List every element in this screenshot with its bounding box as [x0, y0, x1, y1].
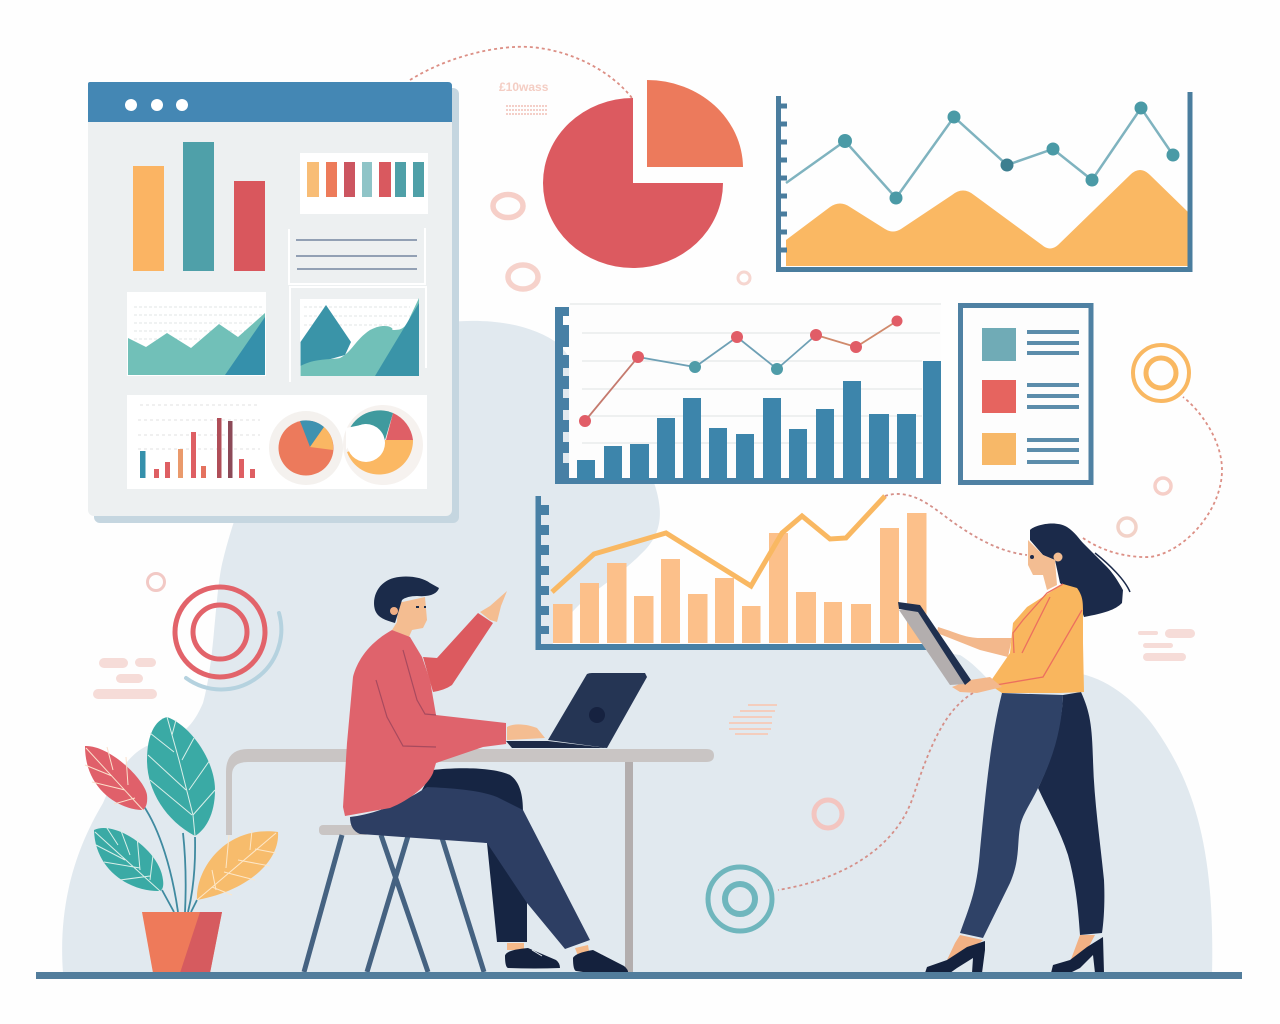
area chart left: [127, 292, 266, 376]
eye: [1030, 555, 1034, 559]
pot: [142, 912, 222, 973]
tablet: [898, 602, 971, 685]
woman: [925, 524, 1130, 973]
shoes: [505, 948, 628, 974]
eyes: [416, 606, 426, 608]
lower teal leaf: [94, 825, 163, 891]
mini donut chart: [343, 405, 423, 485]
blue bar and line chart: [555, 303, 941, 484]
typing hand: [507, 724, 545, 740]
dotted connector: top: [410, 47, 632, 98]
dotted connector: right: [1083, 397, 1222, 557]
teal target ring: [708, 867, 772, 931]
ear: [390, 607, 398, 615]
dotted connector: middle: [885, 494, 1027, 555]
window header: [88, 82, 452, 122]
stool: [304, 825, 484, 972]
top line and area chart: [778, 92, 1190, 270]
decorative rings upper: [493, 194, 750, 289]
stripes mark: [729, 705, 777, 734]
mini bar chart: [140, 418, 255, 478]
mixed charts panel: [127, 395, 427, 489]
hair: [374, 576, 439, 623]
source caption: £10wass: [499, 80, 549, 94]
back leg: [400, 768, 527, 942]
large teal leaf: [147, 717, 215, 836]
source caption: [499, 80, 549, 114]
heels: [925, 937, 1104, 973]
pie chart: [543, 80, 743, 268]
text lines panel: [289, 228, 426, 284]
blouse seams: [990, 584, 1082, 686]
legend panel: [960, 306, 1091, 482]
dashboard window: [88, 82, 459, 523]
mini pie chart: [269, 411, 343, 485]
raised sleeve: [423, 613, 493, 692]
rear arm: [937, 627, 1012, 657]
ankles: [507, 943, 589, 956]
dotted connector: lower: [778, 693, 973, 890]
hair: [1030, 524, 1123, 617]
laptop: [506, 673, 647, 748]
blouse: [988, 584, 1084, 693]
raised hand: [480, 591, 507, 622]
table: [226, 749, 714, 972]
window shadow: [94, 88, 459, 523]
potted plant: [85, 717, 278, 973]
ankles: [947, 935, 1095, 962]
face: [392, 597, 427, 637]
front leg: [350, 787, 590, 949]
yellow leaf: [197, 830, 278, 900]
front hand: [952, 677, 1002, 693]
ear: [1054, 552, 1062, 562]
background blob: [62, 321, 1212, 975]
window dots: [125, 99, 188, 111]
trousers front leg: [960, 693, 1063, 938]
decorative rings right: [814, 345, 1189, 828]
pill marks right: [1138, 629, 1195, 661]
orange bar and line chart: [536, 496, 930, 650]
ground line: [36, 972, 1242, 979]
man: [343, 576, 628, 974]
red target ring: [148, 574, 281, 689]
hair strand: [1095, 553, 1130, 592]
face and neck: [1028, 540, 1057, 590]
red leaf: [85, 746, 147, 810]
pill marks left: [93, 658, 157, 699]
trousers rear leg: [1038, 692, 1104, 935]
window body: [88, 82, 452, 516]
torso: [343, 630, 506, 816]
area chart right: [290, 287, 426, 382]
stems: [143, 805, 197, 912]
small bars panel: [300, 153, 428, 214]
sweater folds: [376, 650, 436, 747]
large bar chart: [133, 142, 265, 271]
